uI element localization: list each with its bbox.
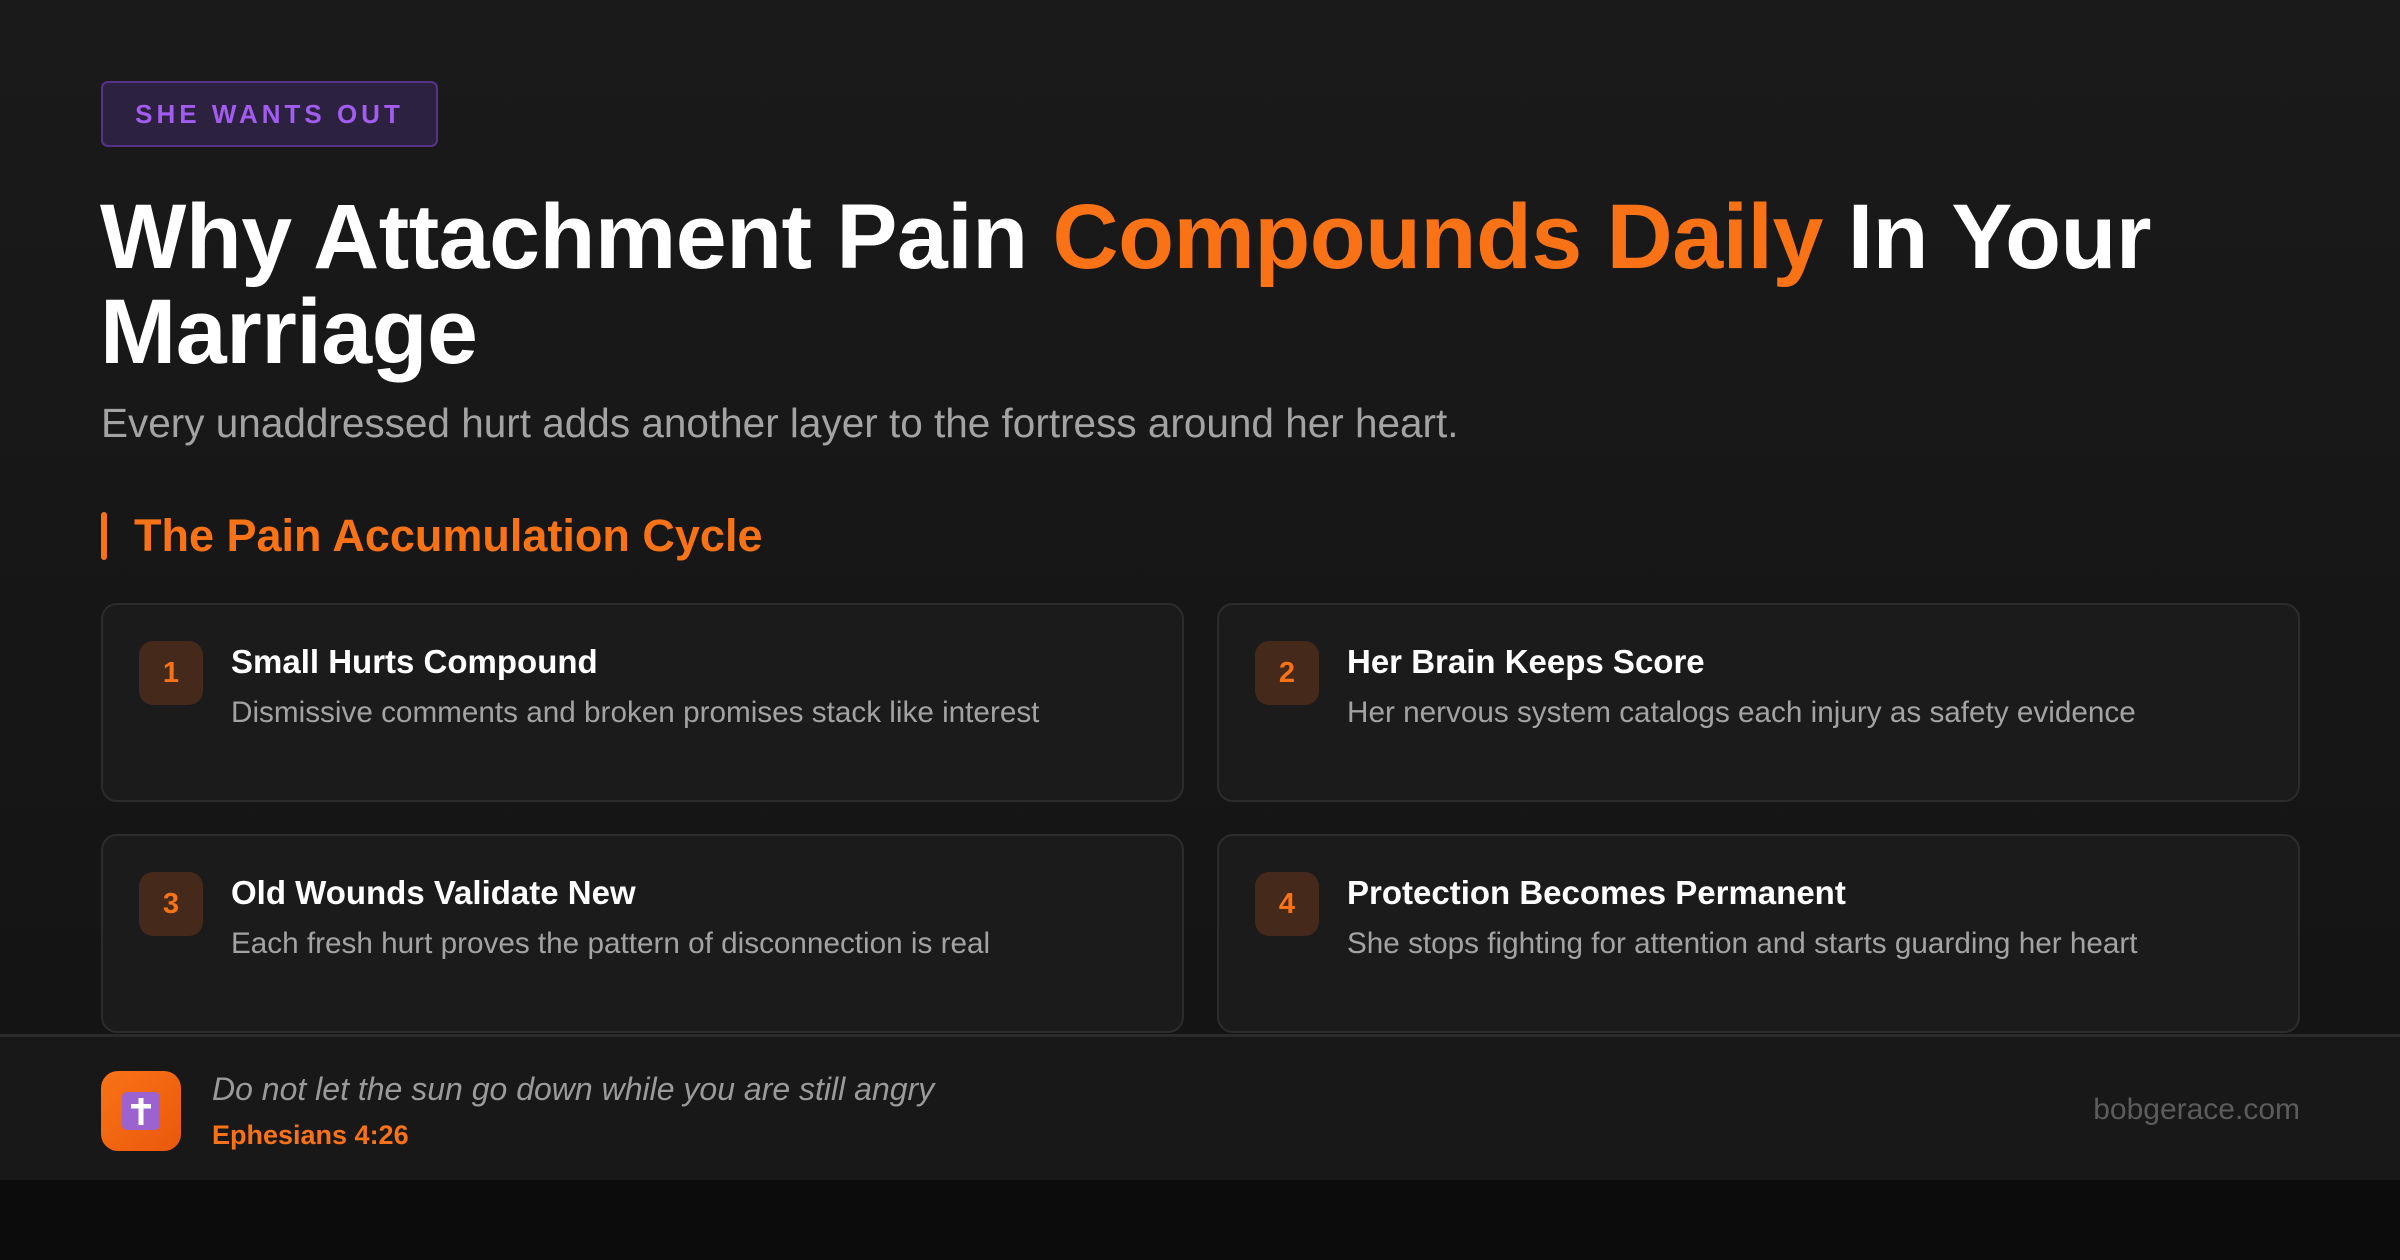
card 2 text: Her nervous system catalogs each injury as safety evidence — [1347, 696, 2136, 729]
subtitle: Every unaddressed hurt adds another layer to the fortress around her heart. — [101, 400, 1459, 446]
card 4 — [1217, 834, 2300, 1033]
card 3 text: Each fresh hurt proves the pattern of disconnection is real — [231, 927, 990, 960]
card 1 title: Small Hurts Compound — [231, 643, 598, 680]
badge — [101, 81, 438, 147]
card 2 title: Her Brain Keeps Score — [1347, 643, 1705, 680]
card 4 text: She stops fighting for attention and starts guarding her heart — [1347, 927, 2138, 960]
number 1: 1 — [163, 656, 179, 688]
number 1 — [139, 641, 203, 705]
site url: bobgerace.com — [2093, 1093, 2300, 1126]
number 3: 3 — [163, 888, 179, 920]
scripture reference: Ephesians 4:26 — [212, 1120, 409, 1150]
number 2 — [1255, 641, 1319, 705]
icon: cross — [101, 1071, 181, 1151]
card 2 — [1217, 603, 2300, 802]
card 1 text: Dismissive comments and broken promises stack like interest — [231, 696, 1039, 729]
number 3 — [139, 872, 203, 936]
card 1 — [101, 603, 1184, 802]
badge: SHE WANTS OUT — [135, 98, 404, 128]
section heading: The Pain Accumulation Cycle — [134, 510, 762, 561]
card 3 title: Old Wounds Validate New — [231, 874, 636, 911]
card 4 title: Protection Becomes Permanent — [1347, 874, 1846, 911]
quote: Do not let the sun go down while you are still angry — [212, 1071, 934, 1107]
number 4 — [1255, 872, 1319, 936]
number 4: 4 — [1279, 888, 1295, 920]
footer — [0, 1034, 2400, 1180]
title: Why Attachment Pain Compounds Daily In Your Marriage — [100, 186, 2151, 383]
number 2: 2 — [1279, 656, 1295, 688]
card 3 — [101, 834, 1184, 1033]
